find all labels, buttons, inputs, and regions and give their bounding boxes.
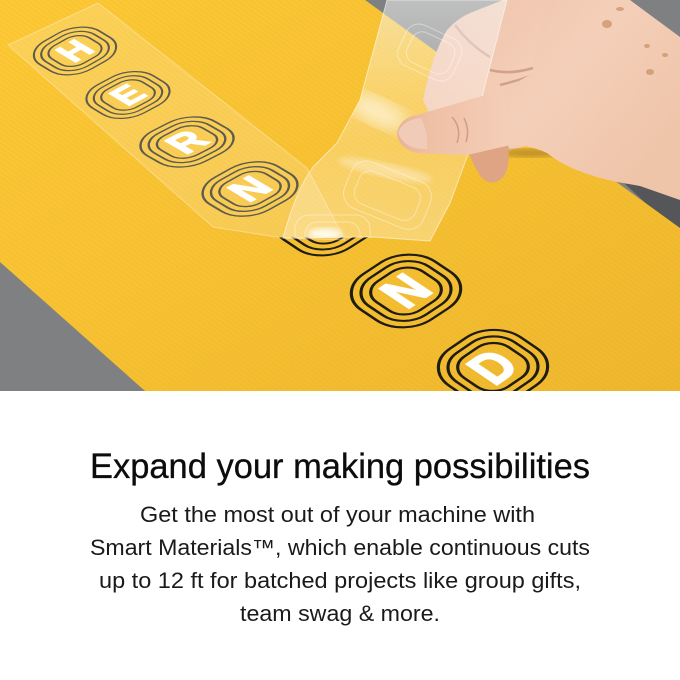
shadow under hand on shirt [500, 149, 560, 157]
lower finger [470, 146, 509, 182]
logo letter H on film: H [48, 35, 103, 67]
peeled film [283, 0, 507, 255]
logo letter N on shirt [350, 254, 462, 328]
logo letter D on shirt: D [454, 341, 531, 393]
logo letter E on film [85, 71, 171, 119]
gray table background [0, 0, 680, 391]
logo letter R on film [139, 116, 235, 168]
transfer film strip on shirt [8, 3, 345, 240]
hand back fingers [423, 0, 544, 150]
palm and thumb [397, 0, 680, 200]
logo letter N on shirt: N [368, 266, 444, 316]
thumb knuckle creases [452, 117, 468, 143]
photo: vinyl transfer being peeled from yellow shirt [0, 0, 680, 415]
body text: team swag & more. [240, 601, 440, 626]
body text [90, 502, 590, 626]
logo letter N on film: N [217, 170, 282, 208]
body text: up to 12 ft for batched projects like group gifts, [99, 568, 581, 593]
heading: Expand your making possibilities [90, 447, 590, 486]
film sheen lower [337, 155, 433, 184]
logo rings of letter hidden under peel [278, 237, 368, 256]
finger creases [455, 25, 533, 85]
yellow shirt [0, 0, 680, 391]
logo letter D on shirt [436, 328, 550, 391]
logo letter H on film [32, 26, 118, 76]
thumb shading [397, 96, 508, 155]
freckles [602, 7, 668, 75]
body text: Get the most out of your machine with [140, 502, 535, 527]
logo letter R on film: R [156, 125, 219, 159]
logo letter N on film [201, 161, 299, 217]
body text: Smart Materials™, which enable continuous cuts [90, 535, 590, 560]
white letter tip under film [308, 228, 342, 240]
film sheen [344, 87, 412, 137]
logo letter E on film: E [101, 79, 155, 111]
thumbnail [398, 118, 427, 149]
ghost rings on film [294, 24, 462, 238]
